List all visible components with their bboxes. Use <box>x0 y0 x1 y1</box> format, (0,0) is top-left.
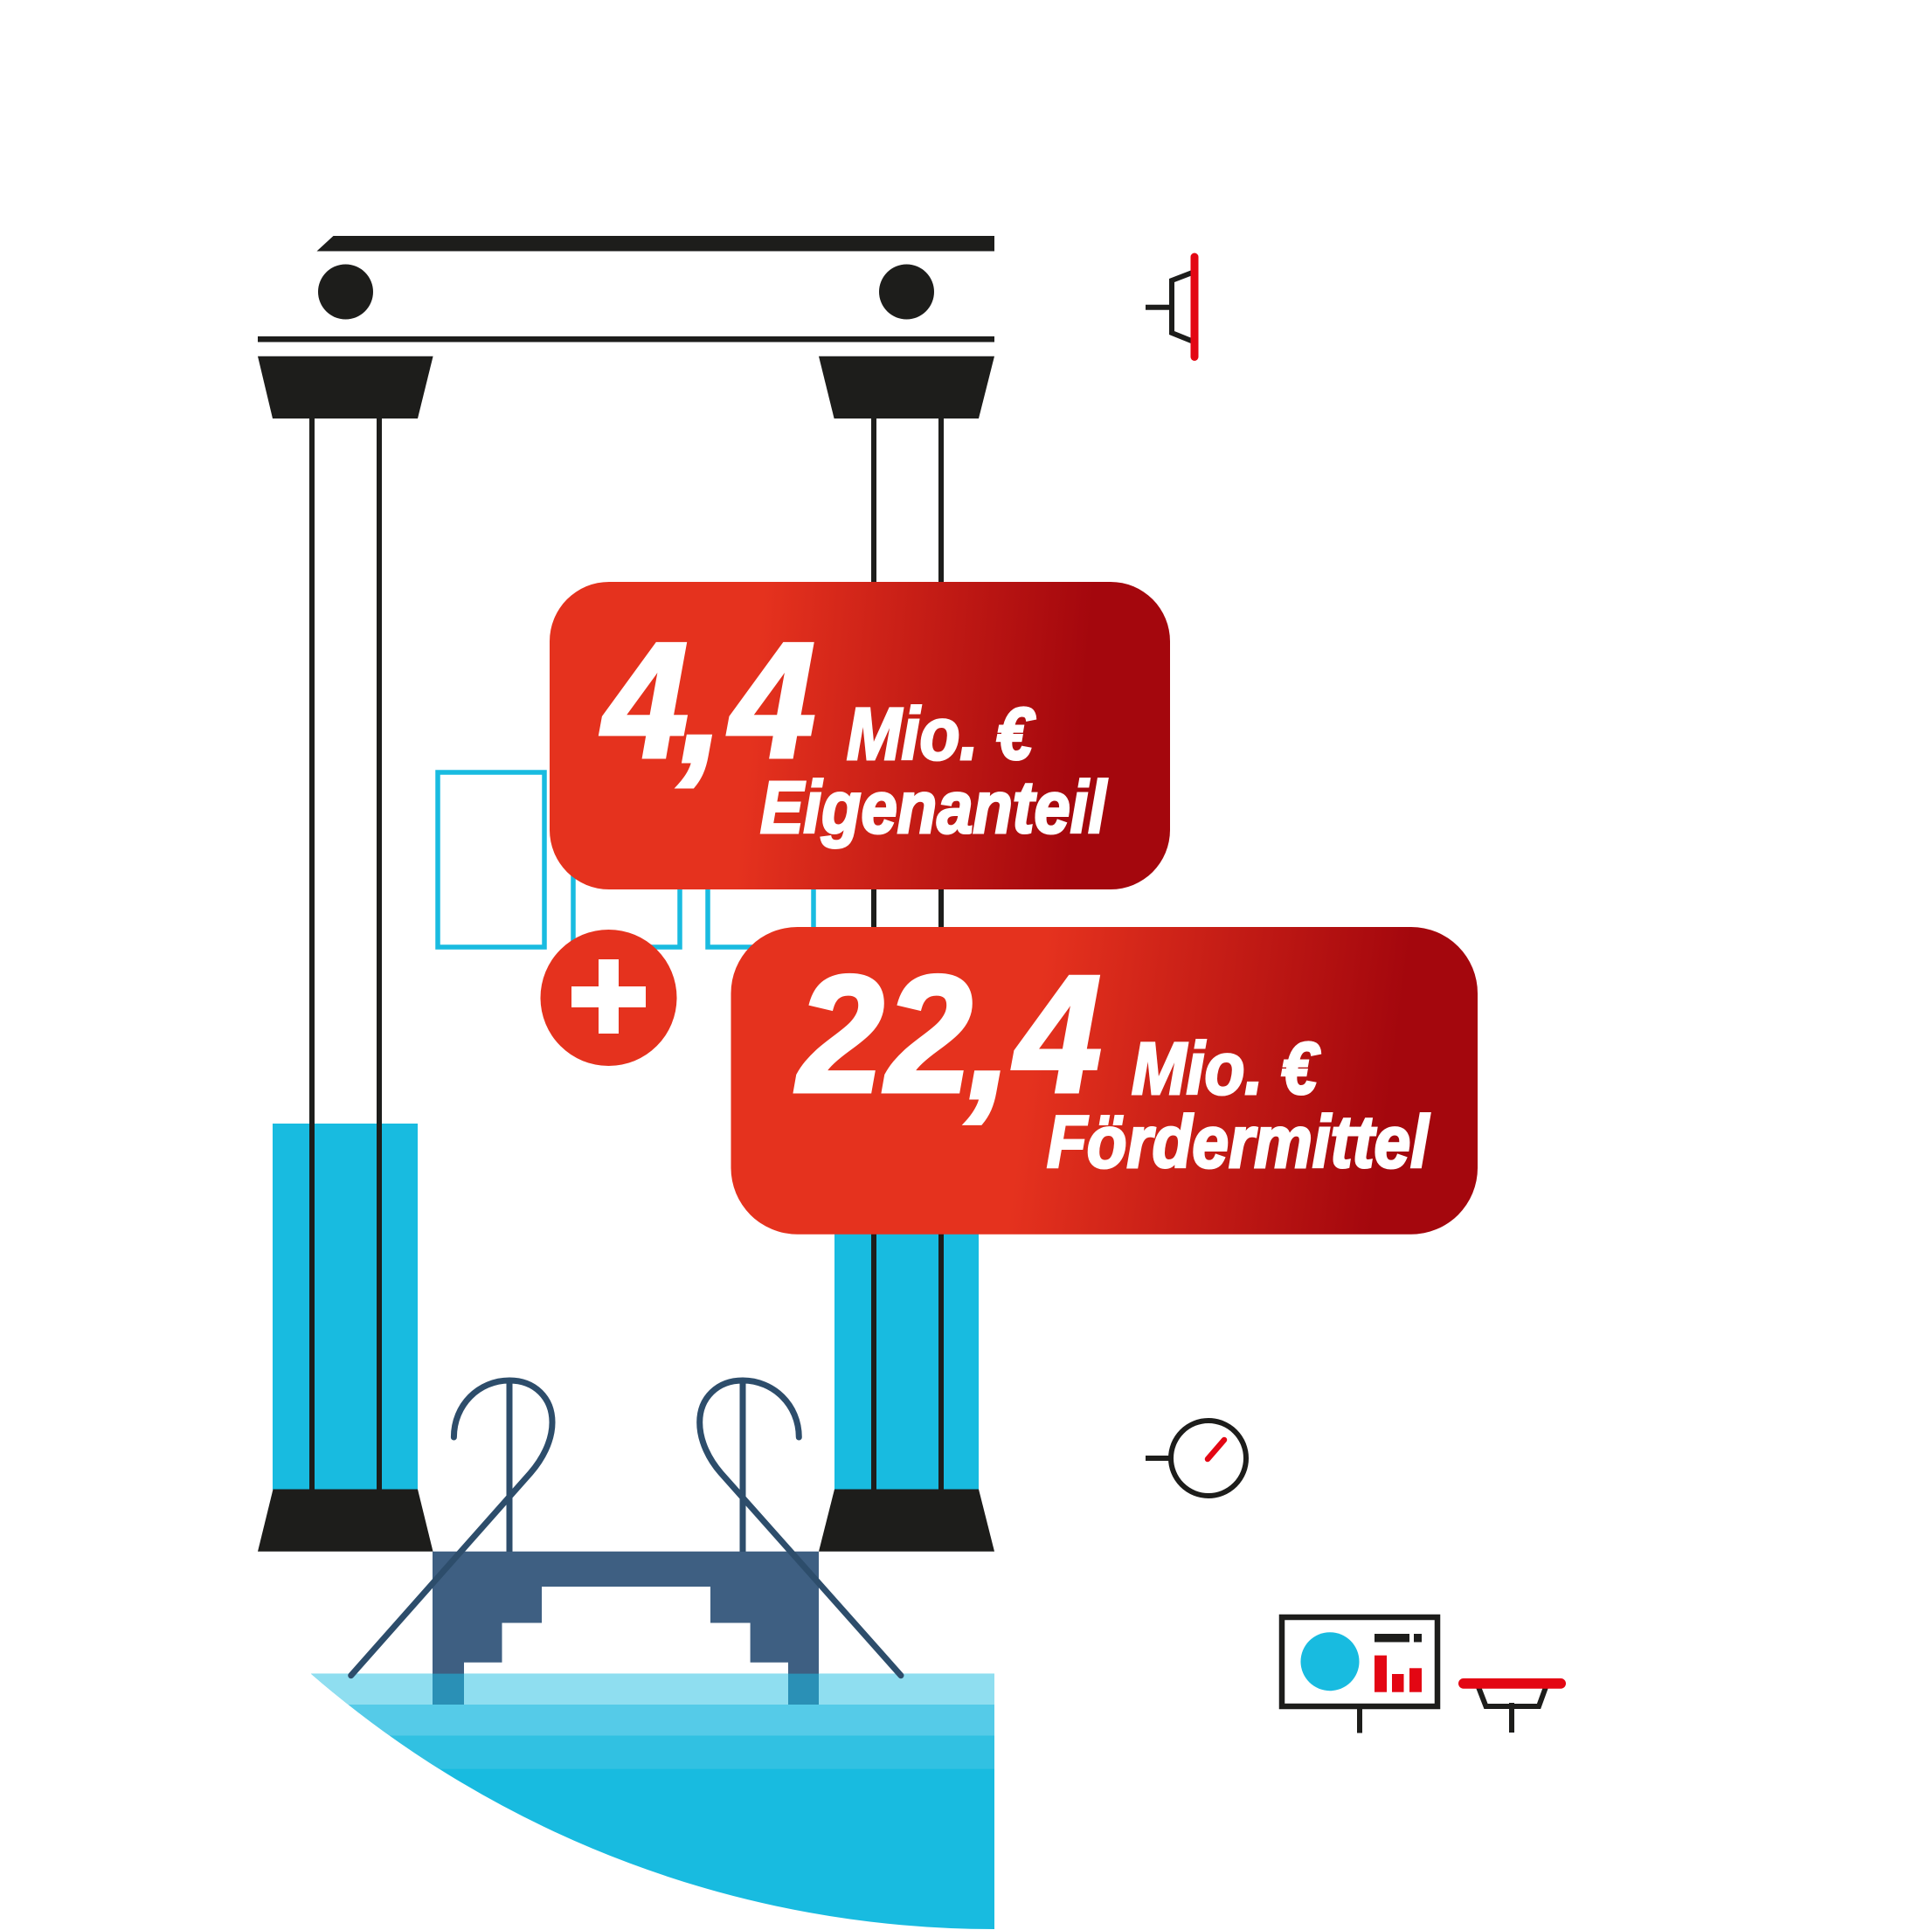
icon: display board <box>1282 1617 1437 1733</box>
amount 4,4: 4,4 <box>601 610 815 796</box>
right tower top cap <box>819 356 994 419</box>
left tower top cap <box>258 356 433 419</box>
right tower verticals <box>871 419 944 1491</box>
right tower base <box>819 1489 994 1552</box>
unit Mio. €: Mio. € <box>1132 1027 1320 1110</box>
bridge <box>433 1552 819 1705</box>
left roof dot <box>318 264 373 320</box>
outlined window rectangles <box>438 772 814 947</box>
roof beam <box>316 236 994 252</box>
left tower verticals <box>309 419 382 1491</box>
card: Fördermittel <box>731 927 1478 1235</box>
icon: table <box>1458 1678 1566 1733</box>
left tower base <box>258 1489 433 1552</box>
right bridge hanger <box>700 1380 901 1676</box>
icon: gauge <box>1146 1421 1246 1496</box>
label Eigenanteil: Eigenanteil <box>760 766 1107 848</box>
right tower blue column <box>834 1124 979 1490</box>
card: Eigenanteil <box>550 582 1170 889</box>
left tower blue column <box>273 1124 418 1490</box>
unit Mio. €: Mio. € <box>847 693 1035 775</box>
label Fördermittel: Fördermittel <box>1047 1101 1430 1183</box>
plus badge <box>540 930 676 1066</box>
icon: speaker <box>1146 257 1195 356</box>
amount 22,4: 22,4 <box>795 941 1101 1132</box>
left bridge hanger <box>351 1380 552 1676</box>
right roof dot <box>879 264 934 320</box>
lower roof line <box>258 336 994 342</box>
water basin <box>297 1674 994 1930</box>
